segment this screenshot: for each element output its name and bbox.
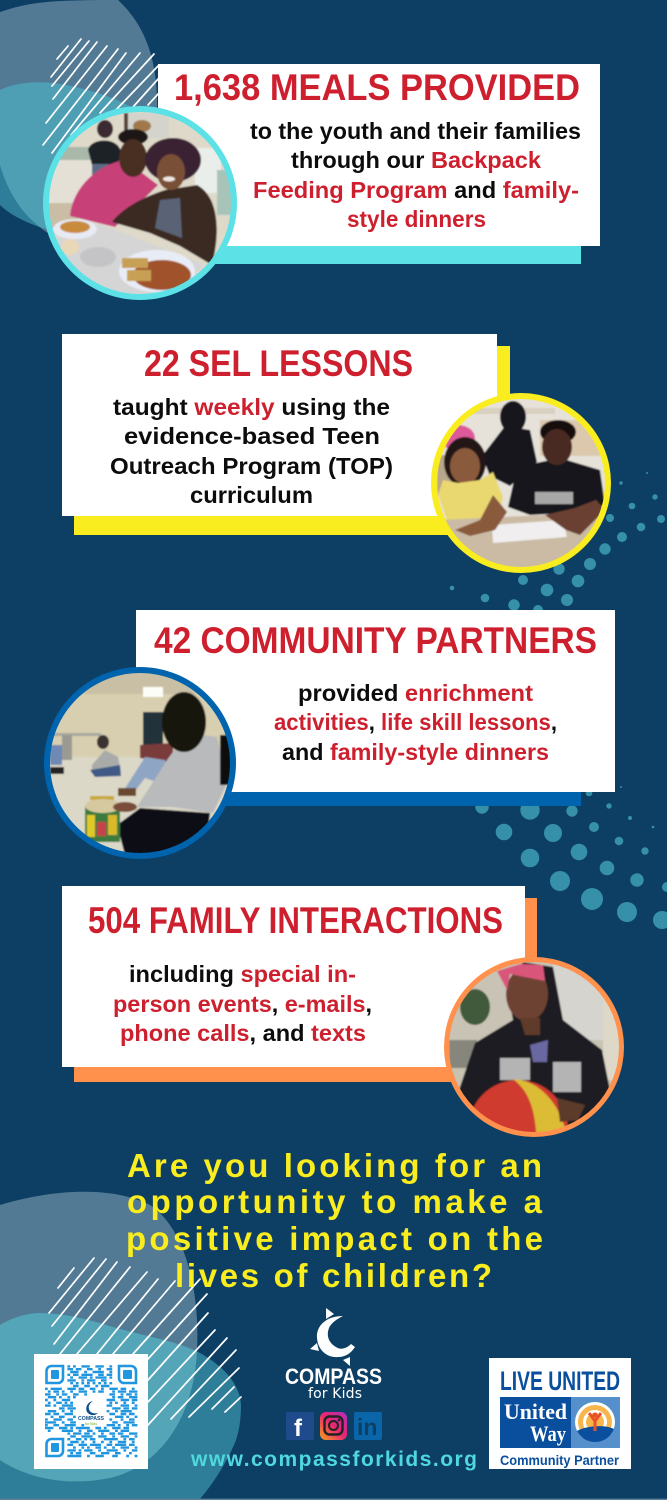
text block: and family-style dinners [282, 739, 549, 765]
social icons [286, 1412, 382, 1442]
photo: girl with beach ball [444, 957, 624, 1137]
QR code [34, 1354, 148, 1469]
decorative blobs bottom [0, 1192, 241, 1499]
website URL: www.compassforkids.org [190, 1448, 477, 1471]
heading: 1,638 MEALS PROVIDED [174, 67, 580, 108]
text block [110, 394, 393, 508]
text block: person events, e-mails, [113, 991, 372, 1017]
dots cluster lower [475, 786, 667, 929]
text block: style dinners [347, 206, 486, 232]
logo wordmark: COMPASS [285, 1364, 382, 1389]
QR center logo [78, 1401, 104, 1426]
panel: meals [43, 64, 600, 300]
dots cluster upper [450, 472, 665, 615]
accent bar [74, 898, 537, 1082]
QR modules [45, 1366, 137, 1456]
decorative hatching top [43, 39, 159, 153]
text block [113, 961, 372, 1046]
panel background [158, 64, 600, 246]
icon: United Way symbol [575, 1402, 615, 1442]
heading: 504 FAMILY INTERACTIONS [88, 900, 503, 941]
live united text: LIVE UNITED [500, 1366, 620, 1396]
United Way wordmark: United [504, 1399, 567, 1424]
photo: teens at dinner table [43, 106, 237, 300]
QR finder centers [51, 1370, 132, 1452]
text block: provided enrichment [298, 680, 533, 706]
icon: instagram [320, 1412, 347, 1440]
heading: 42 COMMUNITY PARTNERS [154, 620, 597, 661]
QR center logo: COMPASS [78, 1416, 104, 1422]
panel: SEL lessons [62, 334, 611, 575]
text block: through our Backpack [291, 147, 542, 173]
United Way wordmark: Way [530, 1421, 566, 1446]
logo tagline: for Kids [308, 1386, 362, 1402]
heading: 22 SEL LESSONS [144, 343, 413, 384]
QR finder patterns [46, 1366, 136, 1456]
panel background [62, 886, 525, 1067]
panel background [62, 334, 497, 516]
QR center logo: for Kids [85, 1422, 97, 1426]
community partner text: Community Partner [500, 1452, 619, 1468]
call to action question: lives of children? [175, 1257, 492, 1294]
blue box [500, 1397, 571, 1448]
call to action question [126, 1147, 543, 1294]
panel: family interactions [62, 886, 624, 1137]
accent bar [225, 791, 581, 806]
photo: students with book [431, 393, 611, 575]
bottom edge line [0, 1499, 667, 1500]
logo mark [310, 1308, 355, 1366]
text block: Feeding Program and family- [253, 177, 579, 203]
light blue box [571, 1397, 620, 1448]
text block [250, 118, 581, 232]
text block: taught weekly using the [113, 394, 390, 420]
text block [274, 680, 557, 765]
photo: drumming session [44, 667, 236, 859]
text block: curriculum [190, 482, 313, 508]
decorative hatching bottom [49, 1258, 241, 1425]
United Way wordmark [504, 1399, 567, 1446]
United Way logo [489, 1358, 631, 1469]
text block: activities, life skill lessons, [274, 709, 557, 735]
accent bar [74, 346, 510, 535]
call to action question: positive impact on the [126, 1220, 543, 1257]
icon: linkedin: in [357, 1414, 377, 1440]
panel: community partners [44, 610, 615, 859]
Compass for Kids logo [285, 1308, 382, 1402]
call to action question: opportunity to make a [127, 1183, 543, 1220]
call to action question: Are you looking for an [127, 1147, 542, 1184]
text block: to the youth and their families [250, 118, 581, 144]
panel background [136, 610, 615, 792]
decorative blobs top [0, 0, 157, 233]
text block: including special in- [129, 961, 356, 987]
text block: Outreach Program (TOP) [110, 453, 393, 479]
icon: facebook: f [294, 1415, 303, 1442]
text block: evidence-based Teen [124, 423, 380, 449]
accent bar [215, 245, 581, 264]
text block: phone calls, and texts [120, 1020, 366, 1046]
